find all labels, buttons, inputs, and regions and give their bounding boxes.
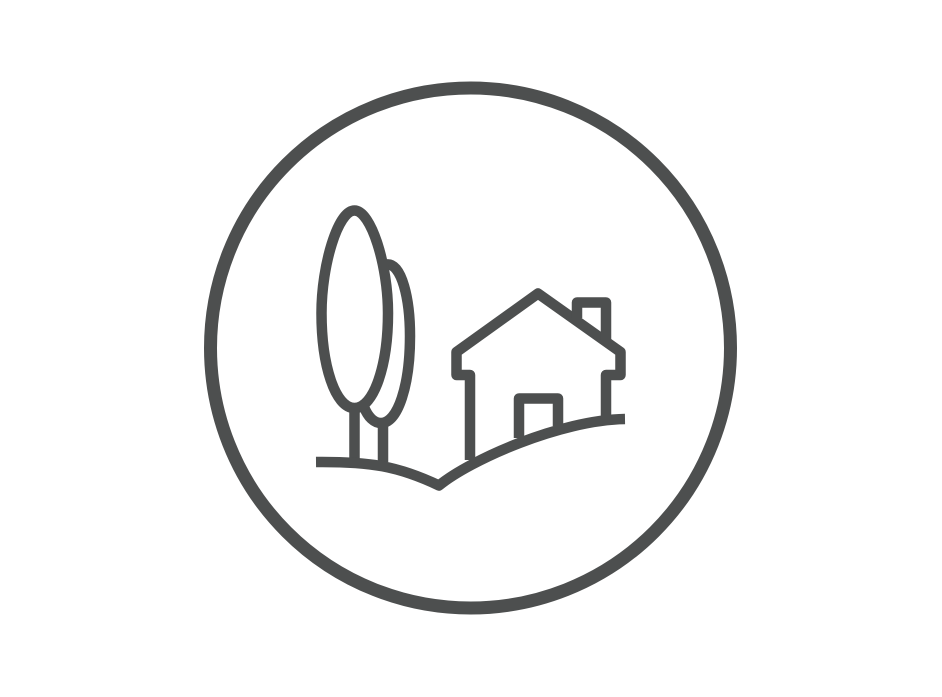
ground hills <box>316 419 625 486</box>
house outline <box>456 294 620 460</box>
door <box>519 398 558 438</box>
front tree <box>322 210 388 460</box>
outer circle <box>210 88 730 608</box>
chimney <box>577 302 606 340</box>
back tree <box>364 264 410 462</box>
